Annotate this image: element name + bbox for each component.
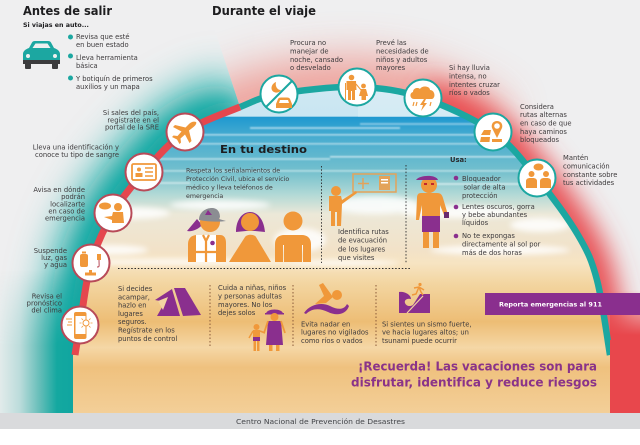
text: preve necesidades: niños y adultos [376,56,428,64]
text: suspende: luz, gas [41,254,67,262]
icon: phone with weather [62,306,98,344]
red block at right edge [610,340,640,413]
text: rutas alternas [520,103,572,144]
icon: car [23,41,60,69]
banner: report emergencies: Reporta emergencias al 911 [499,302,602,308]
text: si sales del pais: portal de la SRE [105,124,159,132]
icon: gas water power [72,244,110,282]
icon: evacuation board with instructor [329,174,396,226]
beach scene inside the arch [60,80,620,413]
text: identifica rutas: de los lugares [338,246,386,254]
text: identificacion: conoce tu tipo de sangre [35,151,119,159]
text: acampar: lugares [118,310,143,318]
text: cuida ninos: Cuida a niñas, niños [218,284,287,292]
text: preve necesidades [376,39,429,72]
divider lines [118,165,411,268]
red glow around the arch [222,30,640,340]
text: comunicacion: comunicación [563,162,610,170]
callout: remember: ¡Recuerda! Las vacaciones son para [358,358,597,374]
text: lluvia: intensa, no [449,72,487,80]
icon: man on the beach [416,176,449,248]
text: evita nadar: Evita nadar en [301,320,350,328]
callout: remember: disfrutar, identifica y reduce riesgos [351,374,597,390]
text: revisa clima: Revisa el [32,292,62,300]
list: car checklist: auxilios y un mapa [76,83,140,91]
text: acampar: Regístrate en los [118,326,175,334]
text: acampar: acampar, [118,294,150,302]
text: lluvia [449,64,500,97]
text: identifica rutas: que visites [338,254,375,262]
text: acampar: seguros. [118,318,147,326]
icon: swimmer [304,283,349,314]
text: procura no manejar: o desvelado [290,64,331,72]
list: use items: No te expongas [462,232,515,240]
list: use items: más de dos horas [462,249,522,257]
text: cuida ninos [218,284,287,317]
text: lluvia: Si hay lluvia [449,64,490,72]
list: use items: y bebe abundantes [462,211,528,219]
text: revisa clima [27,292,62,314]
text: si sales del pais: regístrate en el [107,116,159,124]
text: usa: Usa: [450,156,467,164]
text: avisa [33,186,85,222]
icon: plane [166,114,204,150]
text: acampar: hazlo en [118,302,147,310]
text: preve necesidades: mayores [376,64,406,72]
icon: storm cloud [404,80,442,116]
text: respeta senalamientos [186,168,289,200]
text: avisa: localizarte [50,200,85,208]
text: cuida ninos: mayores. No los [218,301,273,309]
text: respeta senalamientos: Protección Civil, ubica el servicio [186,175,289,183]
text: rutas alternas: haya caminos [520,128,567,136]
text: sismo: Si sientes un sismo fuerte, [382,320,472,328]
text: cuida ninos: y personas adultas [218,292,282,300]
footer bar: Centro Nacional de Prevención de Desastres [236,417,405,426]
text: rutas alternas: Considera [520,103,554,111]
text: avisa: emergencia [45,214,85,222]
icon: civil protection rescuer [187,208,226,262]
icon: route pin [474,114,512,150]
heading: antes de salir: Antes de salir [23,4,112,18]
text: suspende: y agua [44,261,67,269]
text: acampar [118,285,177,343]
list: car checklist: Y botiquín de primeros [75,75,153,83]
list: car checklist: en buen estado [76,41,129,49]
text: lluvia: ríos o vados [449,89,490,97]
text: comunicacion: tus actividades [563,179,615,187]
list: car checklist: Lleva herramienta [76,54,138,62]
text: procura no manejar: noche, cansado [290,56,343,64]
text: acampar: puntos de control [118,335,177,343]
icon: no driving at night [260,76,298,112]
heading: durante el viaje: Durante el viaje [212,4,316,18]
icon: woman and child [249,310,285,351]
text: avisa: podrán [61,193,85,201]
text: evita nadar [301,320,369,345]
subheading: si viajas en auto: Si viajas en auto... [23,22,89,29]
list: use items: directamente al sol por [462,240,541,248]
text: identifica rutas: Identifica rutas [338,228,389,236]
text: comunicacion [563,154,617,187]
icon: id card [126,154,162,190]
icon: woman [229,212,271,262]
text: preve necesidades: necesidades de [376,48,429,56]
list: use items: líquidos [462,219,489,227]
list: use items: Bloqueador [462,175,501,183]
text: respeta senalamientos: Respeta los señalamientos de [186,168,280,174]
text: identificacion [33,144,119,159]
text: rutas alternas: rutas alternas [520,111,567,119]
list: car checklist: Revisa que esté [76,33,130,41]
text: avisa: en caso de [48,208,85,216]
list: use items [454,175,541,257]
list: car checklist: básica [76,62,98,70]
text: procura no manejar: Procura no [290,39,326,47]
text: comunicacion: Mantén [563,154,588,162]
icon: man [275,212,311,262]
text: revisa clima: pronóstico [27,300,62,308]
text: acampar: Si decides [118,285,153,293]
text: evita nadar: como ríos o vados [301,337,363,345]
text: identifica rutas [338,228,389,262]
text: rutas alternas: en caso de que [520,120,572,128]
icon: person with speech bubble [94,194,132,232]
text: suspende: Suspende [34,247,67,255]
text: si sales del pais [103,109,159,132]
text: preve necesidades: Prevé las [376,39,407,47]
list: use items: solar de alta [464,184,505,192]
list: use items: Lentes oscuros, gorra [462,203,535,211]
icon: tsunami and runner [399,283,430,313]
text: si sales del pais: Si sales del país, [103,109,159,117]
text: identificacion: Lleva una identificación y [33,144,119,152]
heading: en tu destino: En tu destino [220,143,307,156]
list: car checklist [68,33,153,91]
text: identifica rutas: de evacuación [338,236,387,244]
callout: remember [351,358,597,390]
arch: teal section [240,87,610,355]
text: sismo [382,320,472,345]
text: avisa: Avisa en dónde [33,186,85,194]
list: use items: protección [462,192,498,200]
teal glow left of the arch [0,107,240,445]
text: sismo: tsunami puede ocurrir [382,337,457,345]
text: cuida ninos: dejes solos [218,309,256,317]
text: rutas alternas: bloqueados [520,136,560,144]
banner: report emergencies [485,293,640,315]
icon: tent [155,288,201,316]
text: respeta senalamientos: emergencia [186,193,223,200]
text: comunicacion: constante sobre [563,171,617,179]
text: procura no manejar: manejar de [290,48,329,56]
text: respeta senalamientos: médico y lleva teléfonos de [186,184,273,192]
text: suspende [34,247,67,269]
text: lluvia: intentes cruzar [449,81,500,89]
icon: adult and child [338,68,376,106]
footer bar [0,413,640,429]
text: evita nadar: lugares no vigilados [301,328,369,336]
arch: red section [75,107,240,355]
text: procura no manejar [290,39,343,72]
text: revisa clima: del clima [31,306,62,314]
icon: people talking [518,160,556,196]
text: sismo: ve hacia lugares altos; un [382,328,469,336]
